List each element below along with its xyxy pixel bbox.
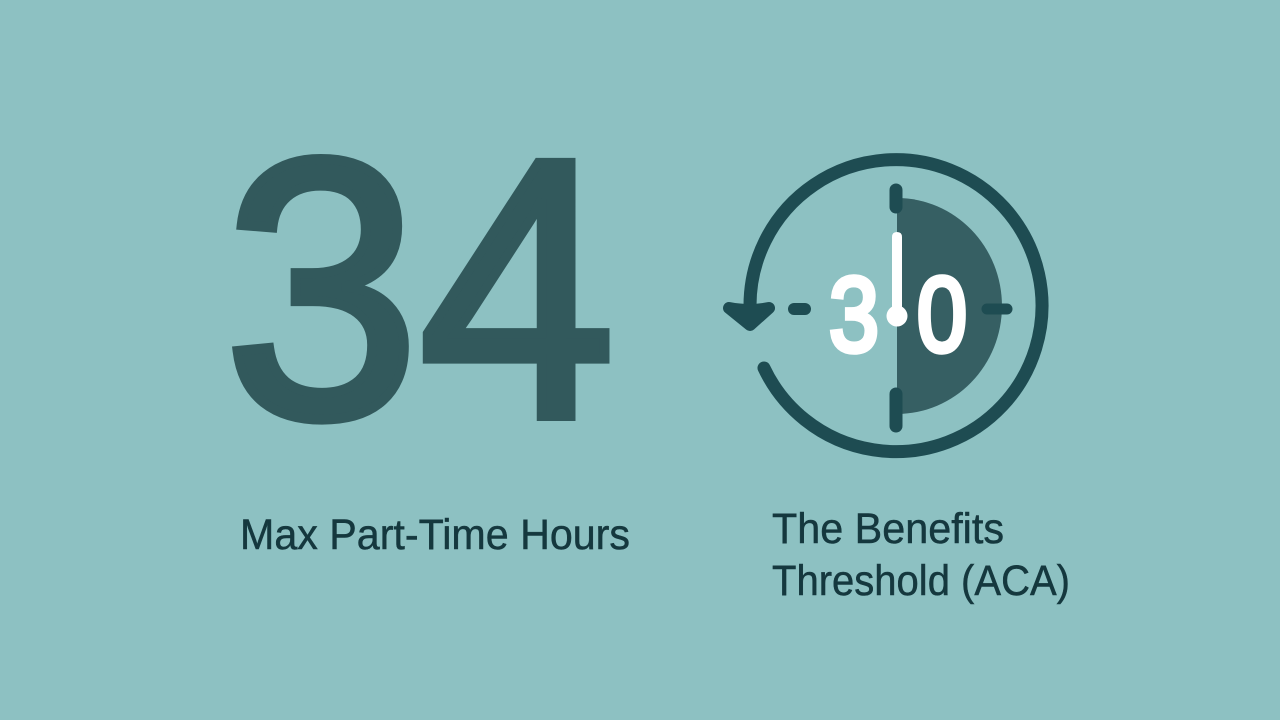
clock tick marks bbox=[794, 190, 1007, 426]
arrowhead bbox=[729, 308, 769, 325]
icon: clock with counter-clockwise arrow and 30 bbox=[729, 160, 1042, 452]
big number: 34: 34 bbox=[224, 83, 615, 494]
white digit 0: 0 bbox=[917, 256, 967, 374]
label: The Benefits Threshold (ACA) bbox=[772, 505, 1070, 605]
clock half-disc wedge bbox=[897, 198, 1002, 414]
label: The Benefits Threshold (ACA): Threshold (ACA) bbox=[772, 557, 1070, 605]
white digit 3: 3 bbox=[829, 256, 879, 374]
label: Max Part-Time Hours: Max Part-Time Hours bbox=[240, 511, 630, 559]
clock hand bbox=[886, 232, 908, 326]
label: The Benefits Threshold (ACA): The Benefits bbox=[772, 505, 1004, 553]
circular arrow ring bbox=[750, 160, 1042, 452]
